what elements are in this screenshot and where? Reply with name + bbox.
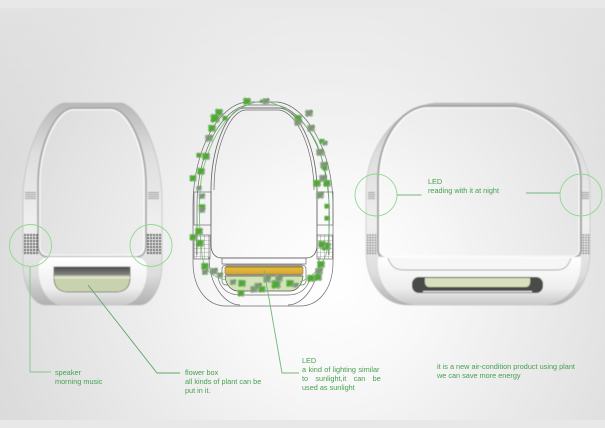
label: LED reading: LED	[428, 177, 442, 186]
speaker grilles	[23, 234, 38, 255]
leader: speaker	[30, 267, 51, 372]
outer body	[23, 103, 162, 305]
label: speaker: morning music	[55, 377, 103, 386]
outer body	[366, 103, 590, 305]
label: flower box: all kinds of plant can be	[185, 377, 261, 386]
base	[378, 257, 581, 305]
LED lamp	[225, 266, 303, 275]
circle: right LED	[560, 174, 602, 216]
label: LED lamp: a kind of lighting similar	[302, 365, 380, 374]
flower box window	[412, 277, 543, 293]
vine	[199, 101, 329, 282]
circle: right speaker	[130, 224, 172, 266]
label: flower box: put in it.	[185, 386, 211, 395]
product: wide view	[366, 103, 590, 305]
leader: LED right	[526, 192, 560, 194]
label: product summary: we can save more energy	[436, 371, 521, 380]
leader: flower box	[88, 285, 180, 373]
label: LED lamp: used as sunlight	[302, 383, 355, 392]
label: LED reading: reading with it at night	[428, 186, 499, 195]
label: LED lamp: to sunlight,it can be	[302, 374, 381, 383]
label: LED lamp: LED	[302, 356, 316, 365]
circle: left speaker	[10, 224, 52, 266]
product: line drawing with plants	[193, 101, 333, 306]
opening	[378, 106, 581, 258]
circle: left LED	[355, 174, 397, 216]
leader: LED lamp	[264, 270, 299, 373]
flower box	[54, 267, 130, 292]
label: flower box: flower box	[185, 368, 219, 377]
product: front view	[23, 103, 162, 305]
leader: LED left	[397, 194, 422, 196]
base	[39, 257, 147, 305]
flower box	[225, 276, 303, 291]
label: speaker: speaker	[55, 368, 82, 377]
label: product summary: it is a new air-condition product using plant	[437, 362, 575, 371]
plant foliage	[189, 98, 331, 297]
callout circles and leader lines	[10, 174, 602, 373]
speaker grilles	[367, 234, 377, 255]
opening	[38, 108, 146, 257]
